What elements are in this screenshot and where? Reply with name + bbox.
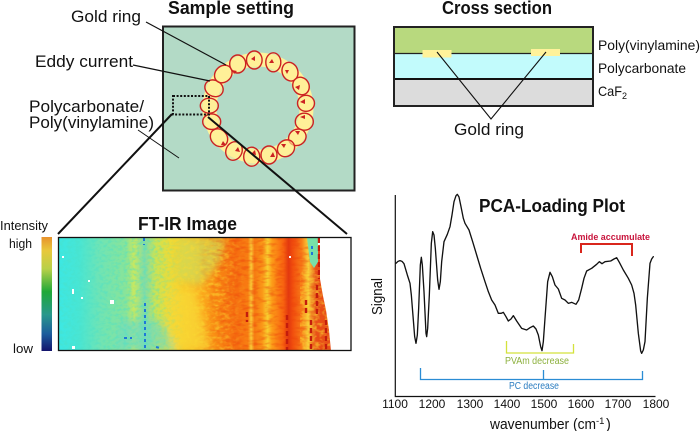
annotation: PVAm decrease: PVAm decrease [505,356,569,367]
x-axis tick labels: 1100 [382,397,408,411]
intensity legend: Intensity [0,219,49,233]
label: eddy current: Eddy current [35,52,133,71]
chart: PCA-loading plot: -1 [596,416,604,427]
intensity legend [0,219,52,356]
x-axis tick labels: 1500 [531,397,558,411]
label: polycarbonate / poly(vinylamine) [29,97,179,158]
panel: sample setting [163,26,354,190]
layer: poly(vinylamine) [394,27,593,54]
axes [395,195,656,396]
x-axis tick labels: 1400 [494,397,521,411]
y-axis title: Signal [370,278,386,315]
annotation: PC decrease [420,368,642,392]
chart: PCA-loading plot [370,194,670,431]
layer: polycarbonate [394,54,593,79]
heading: PCA-loading plot: PCA-Loading Plot [479,196,625,216]
gold ring [210,60,306,156]
selection box with zoom lines [58,96,347,234]
layer labels: Poly(vinylamine) [598,37,700,53]
annotation: PVAm decrease [505,341,574,367]
intensity legend: low [13,341,34,356]
layer labels: Polycarbonate [598,60,686,76]
label: eddy current [35,52,210,81]
gold ring segments [422,50,452,58]
blank unscanned area [320,237,352,351]
eddy current loops [200,51,314,166]
intensity legend: high [9,236,32,251]
x-axis tick labels: 1800 [643,397,670,411]
layer labels [598,37,700,101]
annotation: PC decrease: PC decrease [509,381,559,392]
x-axis tick labels: 1700 [605,397,632,411]
red pixel streaks [247,238,326,350]
blue pixel streaks [124,238,312,350]
annotation: amide accumulate: Amide accumulate [571,232,650,243]
gold ring pointers [437,52,546,119]
label: polycarbonate / poly(vinylamine): Polycarbonate/ [29,97,144,116]
top-right green streak [307,238,318,268]
mottled texture [58,238,188,350]
x-axis tick labels: 1200 [419,397,446,411]
x-axis tick labels: 1300 [457,397,484,411]
annotation: amide accumulate [571,232,650,256]
eddy current arrowheads [221,56,305,157]
label: polycarbonate / poly(vinylamine): Poly(vinylamine) [29,113,154,132]
loading curve [396,194,653,353]
x-axis tick labels [382,397,670,411]
heading: FT-IR image: FT-IR Image [138,214,237,234]
FT-IR heat map [58,237,352,351]
panel: cross section [394,27,593,119]
label: gold ring [71,8,226,65]
layer: CaF2 [394,79,593,105]
label: gold ring: Gold ring [71,8,141,26]
layer labels: CaF [598,83,622,99]
layer labels: 2 [622,91,627,101]
x-axis tick labels: 1600 [568,397,595,411]
label: gold ring cross section: Gold ring [454,120,524,139]
